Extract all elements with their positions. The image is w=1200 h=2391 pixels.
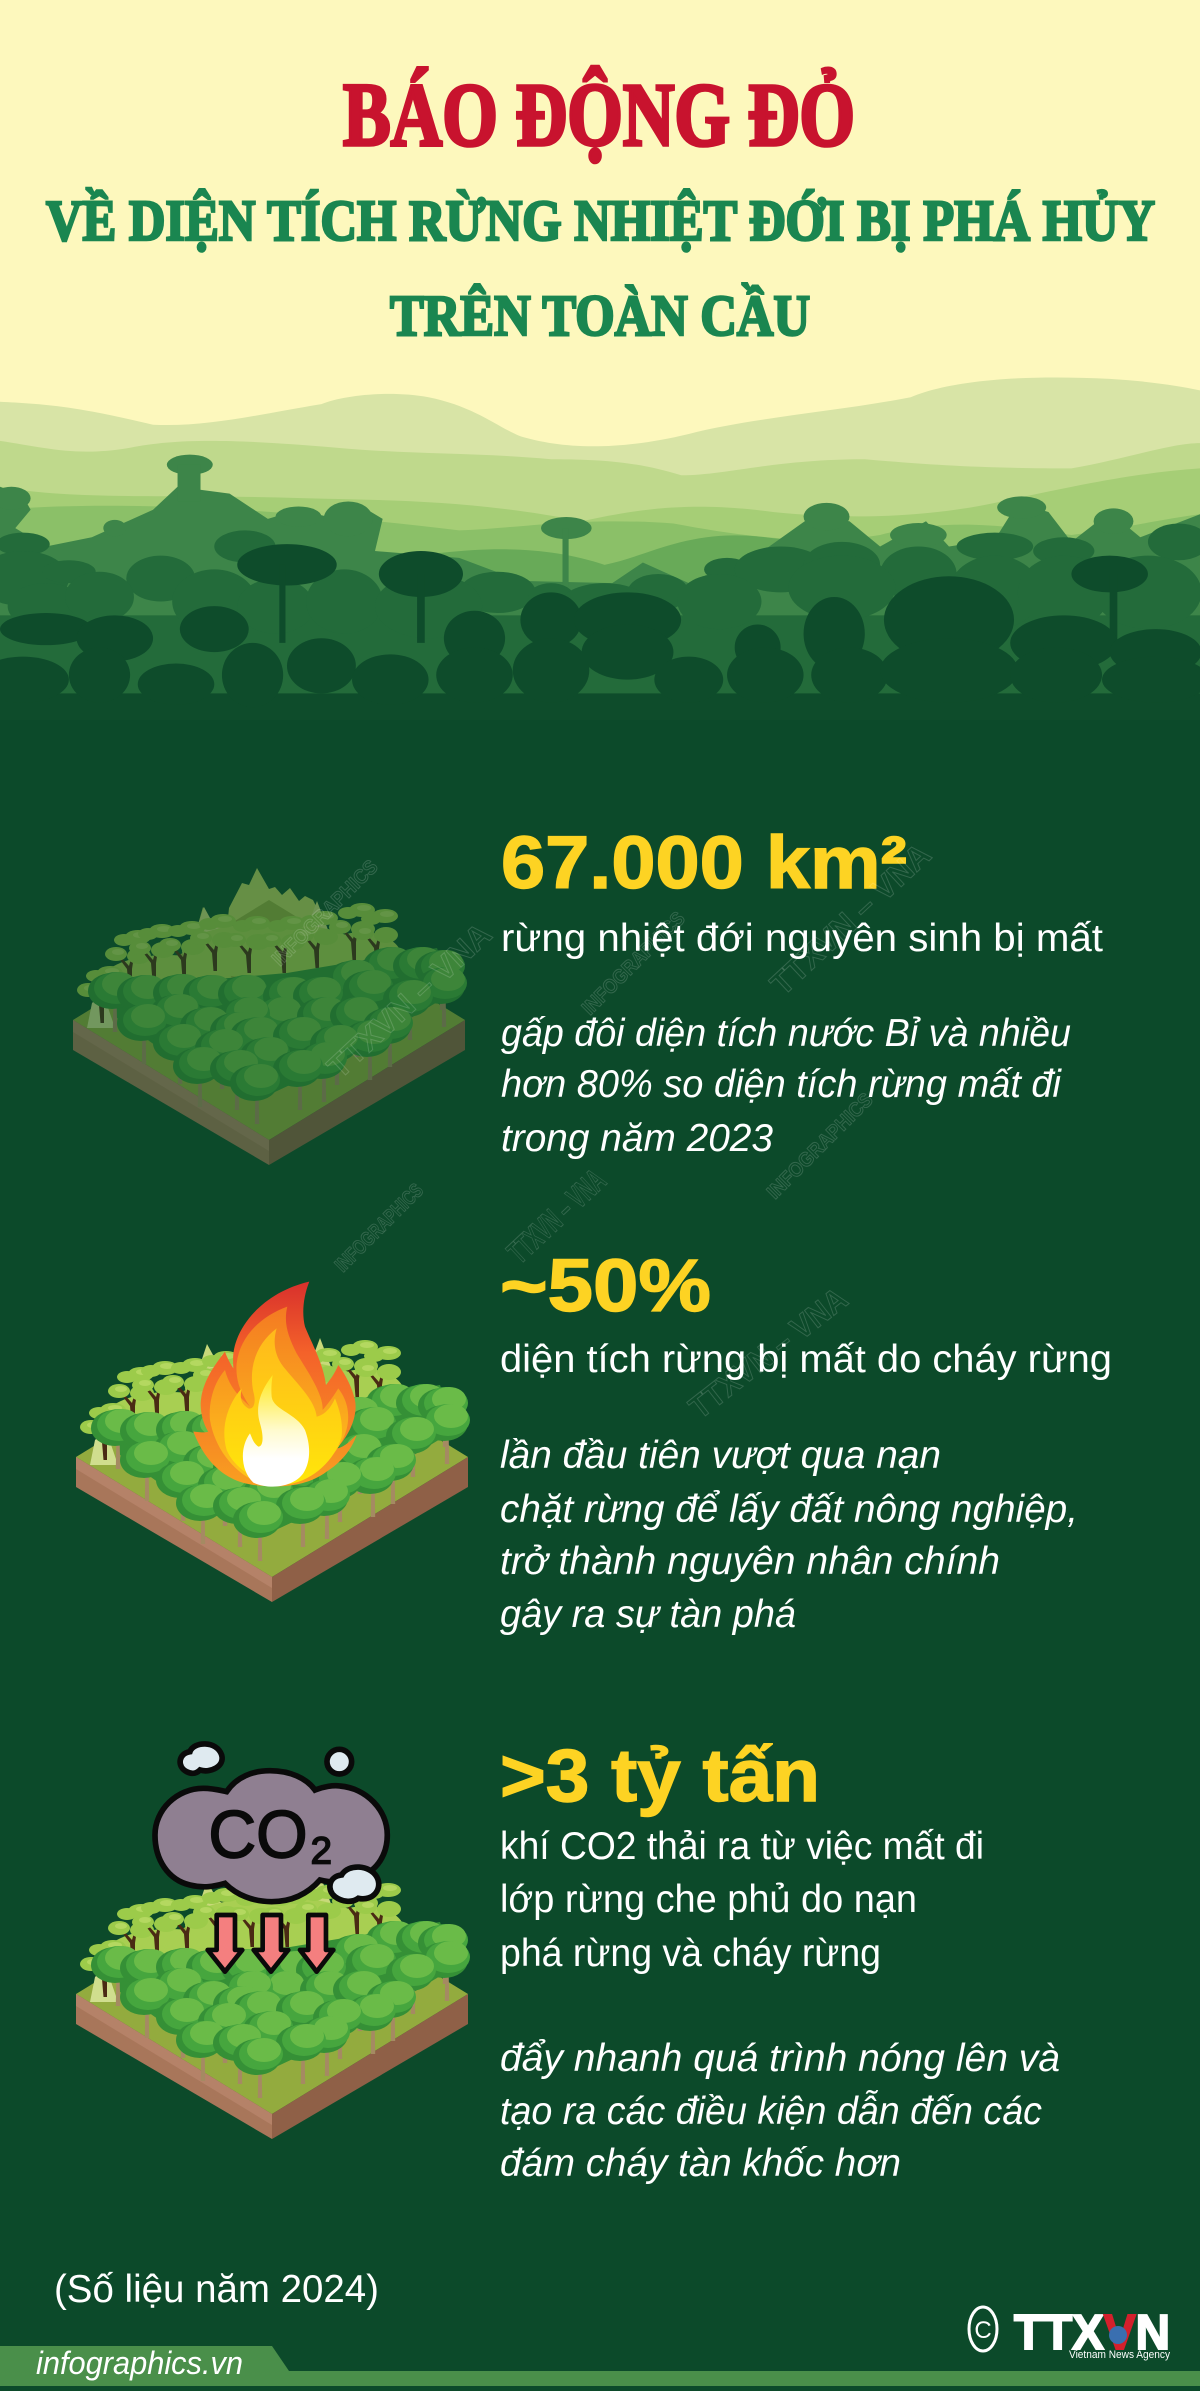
note 3 <box>500 2037 1060 2185</box>
note 3: đẩy nhanh quá trình nóng lên và <box>500 2037 1060 2080</box>
source note: (Số liệu năm 2024) <box>54 2268 379 2311</box>
logo: TTXVN: C <box>974 2317 992 2344</box>
midtone tree line <box>0 455 1200 720</box>
description 3 <box>500 1825 984 1975</box>
title: BÁO ĐỘNG ĐỎ <box>343 65 855 165</box>
note 2: trở thành nguyên nhân chính <box>500 1540 1000 1583</box>
arrow: down left <box>208 1915 242 1972</box>
title <box>46 65 1155 348</box>
note 2: lần đầu tiên vượt qua nạn <box>500 1434 941 1477</box>
watermarks <box>268 836 938 1426</box>
cloud label: CO <box>208 1799 308 1873</box>
watermarks: TTXVN – VNA <box>682 1280 854 1426</box>
watermarks: TTXVN – VNA <box>763 836 938 1002</box>
note 1 <box>501 1012 1071 1160</box>
description 3: lớp rừng che phủ do nạn <box>500 1878 917 1921</box>
cloud body <box>155 1771 387 1902</box>
icon: CO2 cloud with arrows <box>155 1744 387 1972</box>
watermarks: TTXVN – VNA <box>500 1162 613 1270</box>
watermarks: TTXVN – VNA <box>320 916 498 1085</box>
note 2 <box>500 1434 1078 1636</box>
icon: flame <box>193 1282 357 1487</box>
dark tree line <box>0 523 1200 707</box>
note 2: gây ra sự tàn phá <box>500 1593 796 1636</box>
title: TRÊN TOÀN CẦU <box>390 283 810 348</box>
note 2: chặt rừng để lấy đất nông nghiệp, <box>500 1488 1078 1531</box>
section 1 text <box>501 821 1103 1160</box>
note 1: hơn 80% so diện tích rừng mất đi <box>501 1063 1062 1106</box>
arrow: down right <box>300 1915 333 1972</box>
sky background <box>0 0 1200 720</box>
stat: 67.000 km2: 67.000 km² <box>501 821 907 904</box>
description 2: diện tích rừng bị mất do cháy rừng <box>500 1338 1112 1381</box>
small cloud puffs <box>180 1744 379 1901</box>
stat: 50 percent: ~50% <box>500 1244 711 1327</box>
note 3: đám cháy tàn khốc hơn <box>500 2142 901 2185</box>
footer band <box>0 2346 1200 2386</box>
watermarks: INFOGRAPHICS <box>331 1180 428 1277</box>
darkest foreground trees <box>0 544 1200 720</box>
logo: TTXVN: TTXVN <box>1014 2306 1170 2360</box>
stat: over 3 billion tons: >3 tỷ tấn <box>500 1734 820 1817</box>
illustration: burning forest tile <box>76 1282 470 1602</box>
landscape: layered hills and rainforest silhouette <box>0 377 1200 720</box>
website label: infographics.vn <box>36 2345 243 2381</box>
description 1: rừng nhiệt đới nguyên sinh bị mất <box>501 917 1103 960</box>
section 3 text <box>500 1734 1060 2185</box>
note 3: tạo ra các điều kiện dẫn đến các <box>500 2090 1042 2133</box>
note 1: gấp đôi diện tích nước Bỉ và nhiều <box>501 1012 1071 1055</box>
watermarks: INFOGRAPHICS <box>578 908 690 1020</box>
description 3: phá rừng và cháy rừng <box>500 1932 881 1975</box>
description 3: khí CO2 thải ra từ việc mất đi <box>500 1825 984 1868</box>
icon: CO2 cloud with arrows: 2 <box>311 1829 332 1872</box>
illustration: CO2 emission forest tile <box>76 1874 470 2139</box>
watermarks: INFOGRAPHICS <box>763 1089 878 1204</box>
illustration: dimmed primary forest tile <box>73 868 467 1165</box>
section 2 text <box>500 1244 1112 1636</box>
watermarks: INFOGRAPHICS <box>268 856 383 971</box>
arrow: down middle <box>254 1915 288 1972</box>
logo: TTXVN: Vietnam News Agency <box>1069 2349 1170 2361</box>
note 1: trong năm 2023 <box>501 1117 773 1160</box>
